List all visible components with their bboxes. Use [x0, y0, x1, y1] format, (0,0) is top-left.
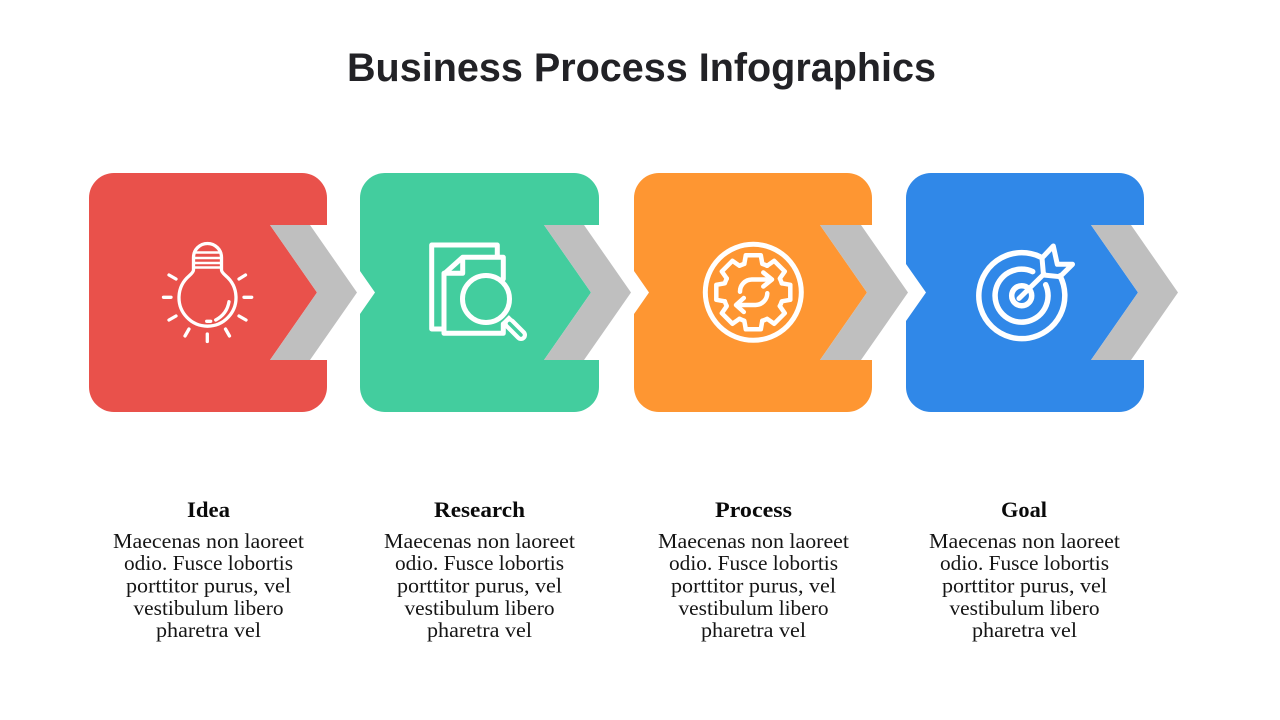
green card: [360, 173, 599, 412]
text block: idea: odio. Fusce lobortis: [124, 551, 293, 575]
text block: research: [384, 497, 575, 642]
text block: process: Maecenas non laoreet: [658, 529, 849, 553]
title: Business Process Infographics: [347, 46, 936, 90]
text block: goal: porttitor purus, vel: [942, 574, 1107, 598]
text block: research: pharetra vel: [427, 618, 532, 642]
text block: idea: Maecenas non laoreet: [113, 529, 304, 553]
red card: [89, 173, 327, 412]
panel: research: [360, 173, 631, 412]
text block: idea: [113, 497, 304, 642]
icon: light bulb: [164, 244, 252, 342]
text block: goal: [929, 497, 1120, 642]
text block: process: odio. Fusce lobortis: [669, 551, 838, 575]
panel: process: [634, 173, 908, 412]
text block: research: Research: [434, 497, 525, 522]
text block: goal: pharetra vel: [972, 618, 1077, 642]
icon: target with arrow: [979, 246, 1072, 339]
blue card: [906, 173, 1144, 412]
text block: research: porttitor purus, vel: [397, 574, 562, 598]
grey chevron arrow: [544, 225, 631, 360]
panel: goal: [906, 173, 1178, 412]
text block: goal: Goal: [1001, 497, 1047, 522]
text block: idea: Idea: [187, 497, 230, 522]
text block: process: vestibulum libero: [678, 596, 828, 620]
text block: research: odio. Fusce lobortis: [395, 551, 564, 575]
text block: goal: Maecenas non laoreet: [929, 529, 1120, 553]
text block: research: Maecenas non laoreet: [384, 529, 575, 553]
grey chevron arrow: [1091, 225, 1178, 360]
text block: process: Process: [715, 497, 792, 522]
text block: idea: porttitor purus, vel: [126, 574, 291, 598]
orange card: [634, 173, 872, 412]
text block: process: [658, 497, 849, 642]
icon: documents and magnifier: [432, 245, 521, 335]
text block: goal: odio. Fusce lobortis: [940, 551, 1109, 575]
panel: idea: [89, 173, 357, 412]
grey chevron arrow: [820, 225, 908, 360]
icon: gear with cycle arrows: [705, 244, 801, 340]
text block: research: vestibulum libero: [404, 596, 554, 620]
text block: goal: vestibulum libero: [950, 596, 1100, 620]
text block: process: pharetra vel: [701, 618, 806, 642]
grey chevron arrow: [270, 225, 357, 360]
text block: idea: pharetra vel: [156, 618, 261, 642]
text block: idea: vestibulum libero: [134, 596, 284, 620]
text block: process: porttitor purus, vel: [671, 574, 836, 598]
